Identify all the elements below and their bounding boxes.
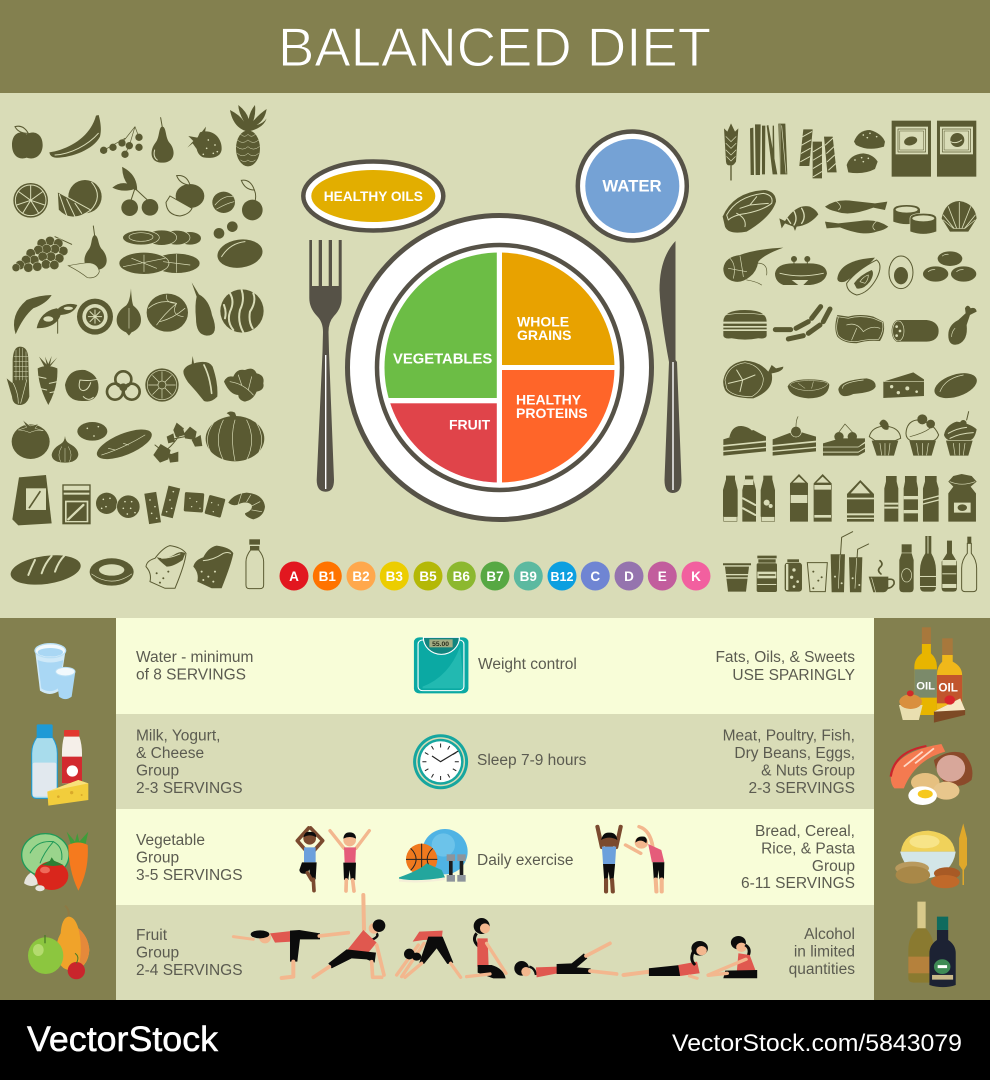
icon: wine and liqueur bottles [908, 902, 956, 987]
panel: left column food illustrations [22, 644, 89, 979]
icon: pea pods [37, 304, 77, 333]
text: fruit servings: 2-4 SERVINGS [136, 962, 243, 979]
badge K: K [691, 569, 701, 584]
icon: salami [892, 320, 939, 342]
badge C: C [590, 569, 600, 584]
icon: cereal box two [937, 121, 976, 177]
icon: three juice bottles [723, 476, 775, 522]
icon: baguette [9, 551, 83, 589]
icon: mussel [837, 258, 880, 295]
badge B2: B2 [352, 569, 370, 584]
figure: leg raise [514, 943, 617, 977]
figure: warrior three [233, 930, 348, 978]
text: water servings: of 8 SERVINGS [136, 666, 246, 684]
icon: pear and half [68, 226, 107, 278]
icon: pepper half [65, 370, 102, 401]
icon: pear, apple, cherry [28, 906, 89, 979]
plate segment: fruit: FRUIT [449, 416, 491, 432]
icon: cheese [883, 372, 924, 398]
icon: oil bottles and desserts [899, 627, 965, 723]
icon: lemon and berries [214, 221, 264, 271]
plate segment: whole grains [502, 250, 622, 365]
badge B9: B9 [520, 569, 537, 584]
icon: two cracker bars [144, 486, 180, 524]
text: vegetable servings: 3-5 SERVINGS [136, 867, 243, 884]
icon: canned jar [757, 556, 777, 592]
text: alcohol: in limited [794, 944, 855, 960]
icon: salmon, ham, eggs [891, 744, 972, 805]
figure: tree pose [297, 828, 323, 891]
text: protein servings: 2-3 SERVINGS [748, 780, 855, 797]
figure: side angle [313, 895, 385, 977]
icon: shrimp [723, 248, 783, 285]
panel: fruit and vegetable icons, top left [12, 105, 267, 336]
water glass [578, 132, 687, 240]
figure: seated forward bend [708, 936, 757, 978]
icon: gooseberry [212, 192, 235, 213]
icon: cut vegetable [77, 299, 113, 335]
badge B6: B6 [453, 569, 470, 584]
badge B12: B12 [551, 570, 574, 584]
icon: carrot [38, 356, 57, 405]
icon: salmon steak [723, 190, 776, 233]
text: fruit servings: Group [136, 944, 179, 962]
water glass: WATER [602, 177, 662, 196]
icon: grapes [12, 236, 72, 272]
figure: arms raised stretch [330, 831, 369, 891]
icon: milk bottle [246, 539, 264, 589]
badge B5 [414, 562, 442, 590]
panel: grains, fish and meat icons, top right [723, 121, 977, 345]
badge K [682, 562, 710, 590]
icon: whiskey bottle [942, 541, 957, 592]
badge E: E [658, 569, 667, 584]
icon: wine bottle [920, 536, 936, 592]
icon: pear [152, 118, 174, 163]
icon: chicken drumstick [948, 306, 977, 345]
badge A [280, 562, 308, 590]
icon: burger [723, 310, 767, 340]
icon: cucumber [93, 423, 156, 465]
icon: coffee cup [869, 561, 894, 592]
icon: eggplant [192, 282, 215, 336]
icon: two fish [825, 200, 888, 233]
icon: parsley [153, 423, 202, 463]
icon: three short bottles [884, 476, 939, 522]
icon: knife [660, 241, 682, 493]
icon: white bread [146, 546, 186, 588]
healthy oils dish: HEALTHY OILS [324, 189, 423, 204]
icon: banana [49, 115, 101, 158]
text: bread servings: 6-11 SERVINGS [741, 875, 855, 892]
icon: cupcake with strawberry [869, 420, 901, 456]
icon: cereal box one [892, 121, 931, 177]
icon: egg halved [889, 256, 913, 289]
plate segment: healthy proteins: PROTEINS [516, 405, 588, 421]
icon: cabbage, tomato, carrot, garlic [22, 832, 88, 891]
icon: scallop shell [942, 201, 977, 232]
footer band [0, 1000, 990, 1080]
icon: dark bread [193, 546, 233, 588]
icon: two cookies [96, 493, 140, 518]
icon: rice bowl one [854, 130, 885, 149]
plate segment: fruit [390, 403, 497, 482]
icon: berries [100, 127, 143, 158]
text: sleep: Sleep 7-9 hours [477, 752, 587, 769]
text: bread servings: Group [812, 858, 855, 875]
icon: oil bottles and desserts: OIL [938, 680, 958, 694]
icon: garlic [52, 436, 78, 463]
icon: cabbage [147, 294, 188, 332]
icon: orange slice [13, 183, 48, 218]
icon: drink can [785, 559, 802, 592]
icon: apple [12, 126, 43, 158]
icon: pineapple [230, 105, 267, 166]
text: weight control: Weight control [478, 656, 577, 673]
plate segment: vegetables [380, 250, 497, 398]
icon: bathroom scale: 55.00 [432, 641, 450, 648]
figure: seated stretch [467, 918, 506, 978]
icon: rice bowl two [847, 153, 878, 173]
icon: watermelon [220, 289, 264, 333]
badge A: A [289, 569, 299, 584]
icon: jam jar [948, 474, 977, 522]
badge B7 [480, 562, 510, 590]
icon: grain packet [62, 484, 91, 524]
icon: bell pepper [183, 356, 217, 402]
icon: clock [413, 734, 468, 789]
icon: short glass with straw [849, 544, 869, 592]
text: dairy servings: 2-3 SERVINGS [136, 780, 243, 797]
icon: sausage [838, 378, 876, 396]
badge B5: B5 [419, 569, 437, 584]
icon: chili pepper [14, 295, 52, 334]
icon: wide carton [847, 473, 874, 522]
text: fruit servings: Fruit [136, 927, 168, 944]
text: dairy servings: Group [136, 762, 179, 780]
text: fats servings: USE SPARINGLY [732, 667, 855, 684]
text: protein servings: Dry Beans, Eggs, [734, 745, 855, 762]
icon: sauce bottle [899, 544, 914, 592]
icon: croissant [228, 493, 265, 519]
text: bread servings: Bread, Cereal, [755, 823, 855, 840]
badge D: D [624, 569, 634, 584]
icon: glasses of water [35, 644, 75, 699]
icon: orange with wedge [57, 180, 102, 219]
icon: milk bottle and cheese [32, 724, 88, 806]
icon: two crackers [184, 492, 226, 518]
icon: cake with cherry [773, 417, 816, 456]
icon: sushi rolls [893, 205, 937, 234]
badge B3: B3 [386, 569, 403, 584]
plate segment: healthy proteins [502, 370, 614, 482]
badge D [614, 562, 644, 590]
icon: pumpkin [206, 411, 264, 461]
icon: flour bag [12, 475, 52, 525]
vitamin badges [280, 562, 710, 590]
panel: meat, dessert and drink icons, bottom right [723, 361, 980, 592]
icon: onion [117, 288, 141, 336]
icon: pasta sticks [750, 124, 787, 175]
figure: downward dog [397, 931, 461, 977]
plate segment: whole grains: GRAINS [517, 327, 571, 343]
badge B1 [313, 562, 342, 590]
text: bread servings: Rice, & Pasta [761, 840, 855, 858]
icon: sausages [775, 307, 830, 339]
figure: cobra pose [624, 941, 708, 978]
header band [0, 0, 990, 93]
icon: exercise ball, basketball, shoe, dumbbells [399, 829, 468, 883]
icon: slim bottle [962, 537, 977, 592]
icon: bagel [90, 558, 134, 586]
badge B9 [514, 562, 543, 590]
icon: plastic cup [723, 563, 751, 592]
icon: pepper rings [107, 371, 140, 400]
icon: crab [775, 256, 827, 285]
badge B1: B1 [319, 569, 336, 584]
icon: cake with orange [723, 426, 766, 456]
healthy oils dish [303, 162, 443, 230]
icon: mash bowl, biscuits, wheat [895, 823, 967, 888]
icon: cupcake with swirl [944, 412, 977, 456]
text: vegetable servings: Group [136, 850, 179, 866]
icon: bathroom scale [414, 637, 468, 693]
icon: lettuce [224, 369, 264, 402]
text: vegetable servings: Vegetable [136, 832, 205, 849]
text: dairy servings: Milk, Yogurt, [136, 728, 220, 744]
icon: oil bottles and desserts: OIL [916, 681, 935, 692]
icon: citrus wheel [145, 368, 179, 402]
icon: cherries with leaves [112, 168, 158, 216]
plate segment: vegetables: VEGETABLES [393, 351, 492, 367]
icon: citrus slices row two [119, 252, 200, 274]
icon: steak [788, 379, 829, 398]
icon: citrus slices row one [123, 230, 201, 245]
icon: fork [309, 240, 342, 492]
badge B3 [380, 562, 409, 590]
text: protein servings: & Nuts Group [761, 762, 855, 780]
icon: tall glass with straw [831, 532, 853, 592]
panel: servings table [0, 618, 990, 1000]
text: fats servings: Fats, Oils, & Sweets [715, 649, 855, 666]
icon: cake with two cherries [823, 424, 865, 456]
icon: loaf [931, 368, 980, 403]
icon: wheat [724, 123, 738, 180]
badge B2 [346, 562, 376, 590]
footer logo: VectorStock [27, 1020, 219, 1059]
plate segment: whole grains: WHOLE [517, 314, 569, 330]
text: dairy servings: & Cheese [136, 745, 204, 762]
text: daily exercise: Daily exercise [477, 852, 573, 869]
text: alcohol: Alcohol [804, 926, 855, 943]
icon: cupcake with berries [906, 414, 939, 456]
text: water servings: Water - minimum [136, 649, 253, 666]
icon: apple and slice [166, 176, 204, 216]
badge E [648, 562, 677, 590]
icon: cherry with leaf [241, 180, 263, 220]
chart: plate of food groups [348, 216, 652, 520]
icon: tomato [12, 420, 50, 459]
icon: three beans [923, 251, 976, 282]
badge B7: B7 [486, 569, 504, 584]
icon: fusilli [799, 129, 837, 178]
icon: striped fish [779, 206, 818, 231]
title: BALANCED DIET [278, 16, 711, 78]
panel: right column food illustrations [891, 627, 972, 987]
text: alcohol: quantities [789, 961, 855, 978]
panel: vegetable and bakery icons, bottom left [7, 347, 265, 589]
plate segment: healthy proteins: HEALTHY [516, 392, 582, 408]
figure: arms overhead [597, 827, 621, 892]
badge C [581, 562, 610, 590]
icon: potato [77, 422, 107, 441]
icon: strawberry [187, 127, 222, 158]
figures and equipment [233, 828, 617, 978]
badge B12 [548, 562, 576, 590]
icon: meat cut [835, 315, 884, 343]
icon: corn [7, 347, 29, 405]
icon: two milk cartons [790, 469, 832, 522]
figure: side bend [626, 827, 664, 892]
icon: ham [723, 361, 783, 398]
icon: glass of water [807, 563, 827, 592]
badge B6 [447, 562, 476, 590]
text: protein servings: Meat, Poultry, Fish, [723, 728, 855, 744]
footer url: VectorStock.com/5843079 [672, 1030, 962, 1057]
